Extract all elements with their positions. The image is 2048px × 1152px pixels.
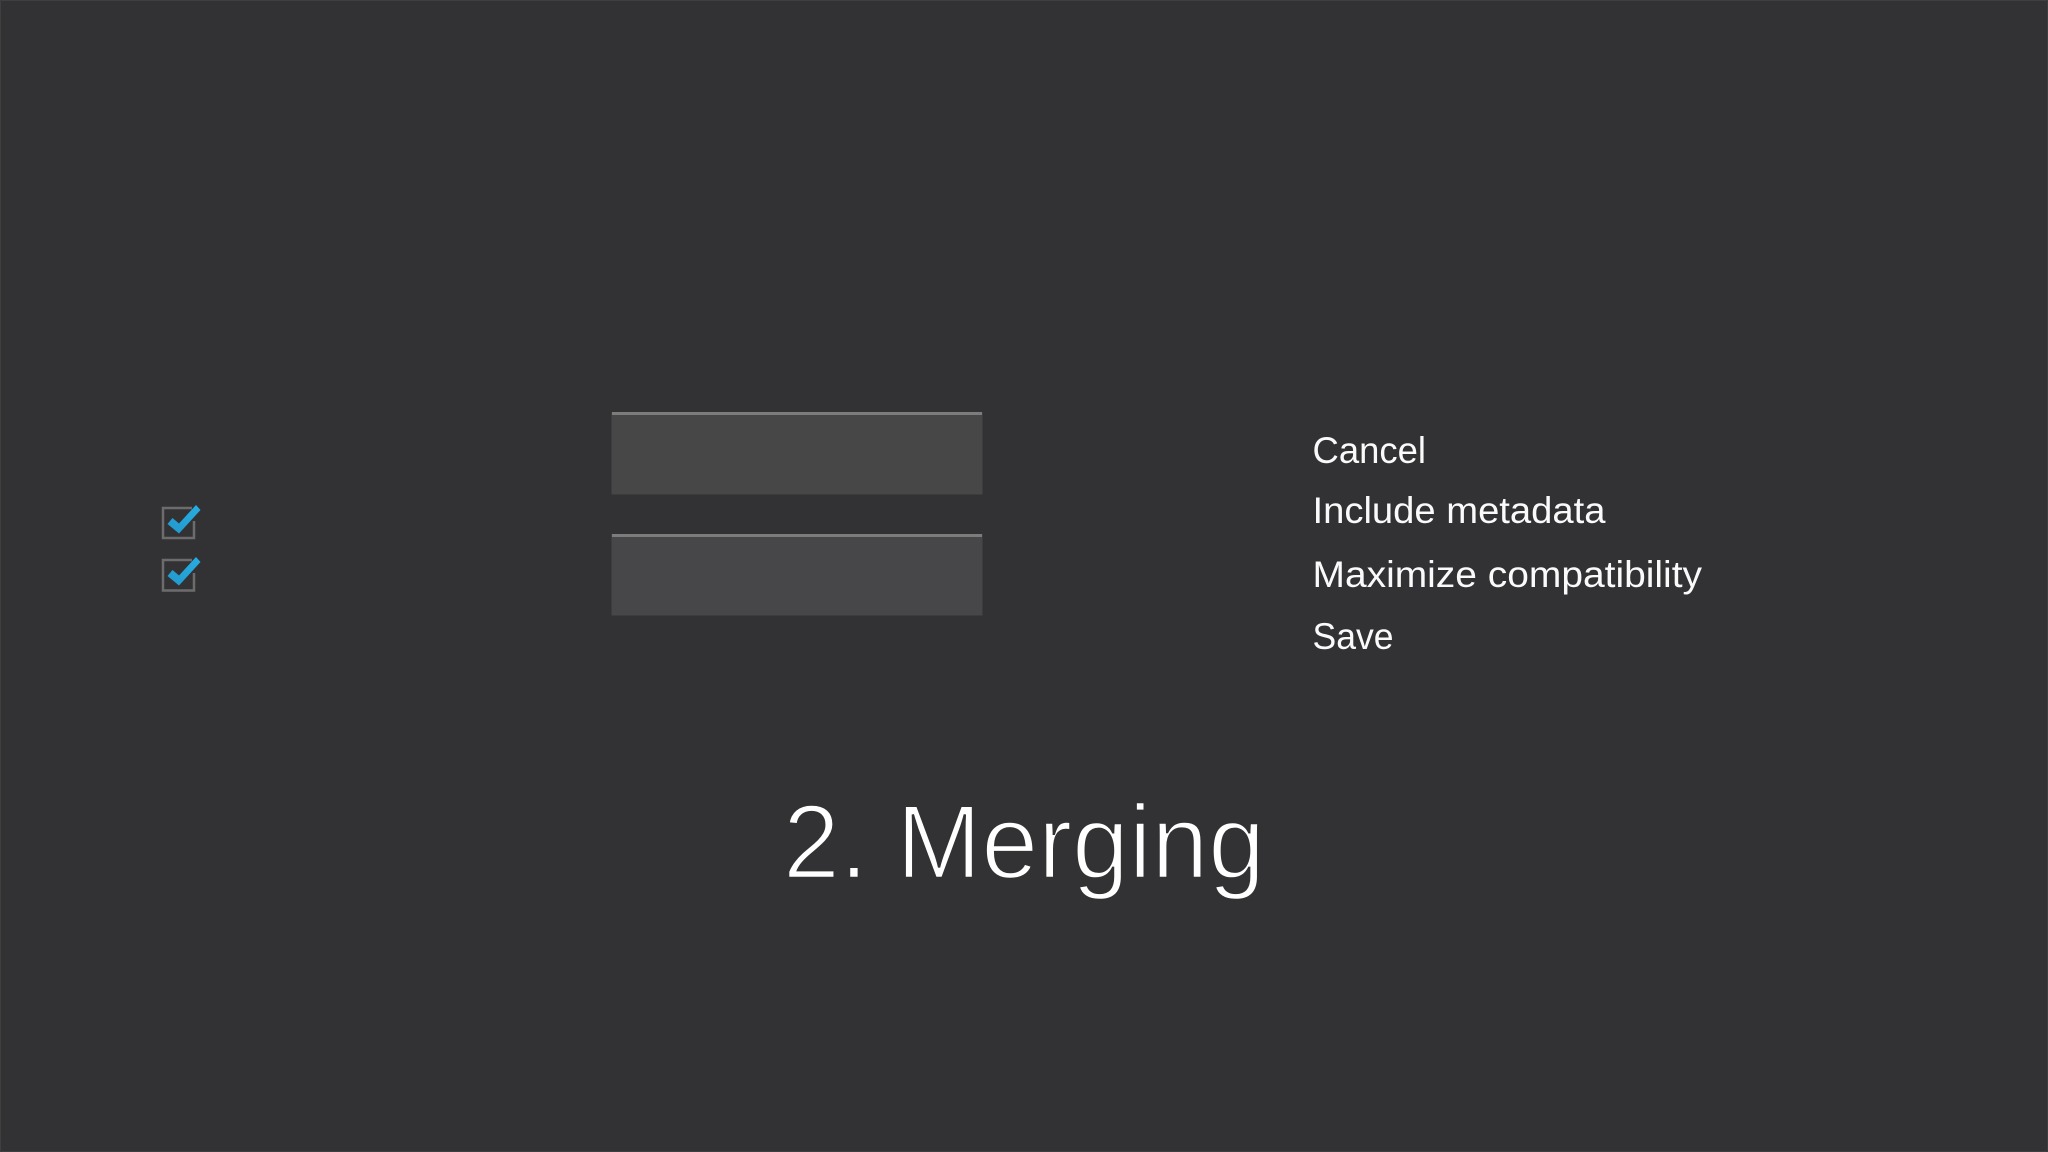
input field 1 <box>612 412 982 494</box>
title: 2. Merging <box>783 784 1265 901</box>
icon: checked checkbox 2 <box>163 557 200 590</box>
label: Maximize compatibility: Maximize compatibility <box>1312 553 1702 595</box>
icon: checked checkbox 1 <box>163 505 200 538</box>
label: Cancel: Cancel <box>1312 429 1426 471</box>
input field 2 <box>612 534 982 616</box>
panel: checkboxes <box>163 505 200 590</box>
label: Include metadata: Include metadata <box>1312 489 1606 531</box>
panel: option labels <box>1312 429 1702 657</box>
label: Save: Save <box>1312 615 1394 657</box>
panel: input fields <box>612 412 982 616</box>
